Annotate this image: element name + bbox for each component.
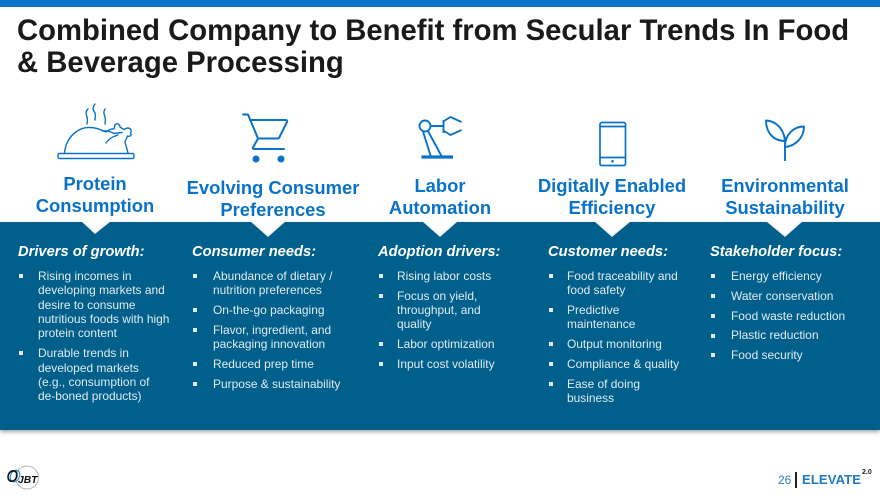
column: adoption drivers: Input cost volatility <box>397 357 495 371</box>
column: consumer needs: packaging innovation <box>213 337 325 351</box>
column: customer needs: Customer needs: <box>548 244 668 260</box>
column: adoption drivers: Labor optimization <box>397 337 495 351</box>
column: stakeholder focus: Water conservation <box>731 289 833 303</box>
heading: digitally enabled efficiency <box>538 175 686 218</box>
column: stakeholder focus: Food security <box>731 348 803 362</box>
logo: JBT <box>7 466 39 490</box>
column: drivers of growth <box>18 244 169 403</box>
column: drivers of growth: developed markets <box>38 360 139 374</box>
column: consumer needs <box>192 244 340 391</box>
page number: 26 <box>778 473 791 487</box>
column: drivers of growth: Durable trends in <box>38 346 129 360</box>
heading: protein consumption <box>36 173 154 216</box>
column: drivers of growth: Rising incomes in <box>38 269 132 283</box>
top bar <box>0 0 880 7</box>
column: adoption drivers: Focus on yield, <box>397 289 477 303</box>
heading: environmental sustainability: Sustainability <box>725 197 845 218</box>
heading: labor automation: Automation <box>389 197 491 218</box>
title: & Beverage Processing <box>17 46 344 78</box>
column: adoption drivers: quality <box>397 317 432 331</box>
heading: labor automation: Labor <box>414 175 466 196</box>
column: customer needs <box>548 244 680 405</box>
column: drivers of growth: desire to consume <box>38 298 136 312</box>
column: customer needs: Food traceability and <box>567 269 678 283</box>
heading: environmental sustainability <box>721 175 849 218</box>
column: stakeholder focus: Plastic reduction <box>731 328 819 342</box>
column: customer needs: Ease of doing <box>567 377 640 391</box>
column: stakeholder focus: Energy efficiency <box>731 269 822 283</box>
column: customer needs: Output monitoring <box>567 337 662 351</box>
heading: protein consumption: Consumption <box>36 195 154 216</box>
heading: labor automation <box>389 175 491 218</box>
column: drivers of growth: de-boned products) <box>38 389 142 403</box>
column: drivers of growth: developing markets and <box>38 283 165 297</box>
title <box>17 14 849 78</box>
title: Combined Company to Benefit from Secular Trends In Food <box>17 14 849 46</box>
heading: digitally enabled efficiency: Efficiency <box>569 197 655 218</box>
column: customer needs: business <box>567 391 614 405</box>
heading: evolving consumer preferences: Preferences <box>220 199 326 220</box>
column: adoption drivers: Rising labor costs <box>397 269 491 283</box>
column: stakeholder focus: Stakeholder focus: <box>710 244 842 260</box>
heading: evolving consumer preferences: Evolving Consumer <box>187 177 359 198</box>
column: consumer needs: Purpose & sustainability <box>213 377 340 391</box>
column: consumer needs: Flavor, ingredient, and <box>213 323 331 337</box>
column: adoption drivers <box>378 244 500 371</box>
column: consumer needs: nutrition preferences <box>213 283 322 297</box>
divider <box>795 472 796 488</box>
column: customer needs: Predictive <box>567 303 619 317</box>
column: drivers of growth: Drivers of growth: <box>18 244 144 260</box>
column: drivers of growth: (e.g., consumption of <box>38 375 149 389</box>
column: customer needs: Compliance & quality <box>567 357 679 371</box>
heading: evolving consumer preferences <box>187 177 360 220</box>
heading: protein consumption: Protein <box>63 173 127 194</box>
column: customer needs: food safety <box>567 283 625 297</box>
column: adoption drivers: Adoption drivers: <box>378 244 500 260</box>
heading: environmental sustainability: Environmental <box>721 175 849 196</box>
logo: JBT: JBT <box>18 475 39 486</box>
logo: ELEVATE 2.0: ELEVATE <box>802 472 861 487</box>
column: stakeholder focus <box>710 244 845 362</box>
column: drivers of growth: nutritious foods with high <box>38 312 169 326</box>
column: consumer needs: On-the-go packaging <box>213 303 324 317</box>
column: stakeholder focus: Food waste reduction <box>731 309 845 323</box>
column: customer needs: maintenance <box>567 317 635 331</box>
heading: digitally enabled efficiency: Digitally Enabled <box>538 175 686 196</box>
column: drivers of growth: protein content <box>38 326 117 340</box>
logo: ELEVATE 2.0: 2.0 <box>862 469 872 476</box>
column: consumer needs: Abundance of dietary / <box>213 269 332 283</box>
column: consumer needs: Reduced prep time <box>213 357 314 371</box>
column: consumer needs: Consumer needs: <box>192 244 316 260</box>
column: adoption drivers: throughput, and <box>397 303 481 317</box>
